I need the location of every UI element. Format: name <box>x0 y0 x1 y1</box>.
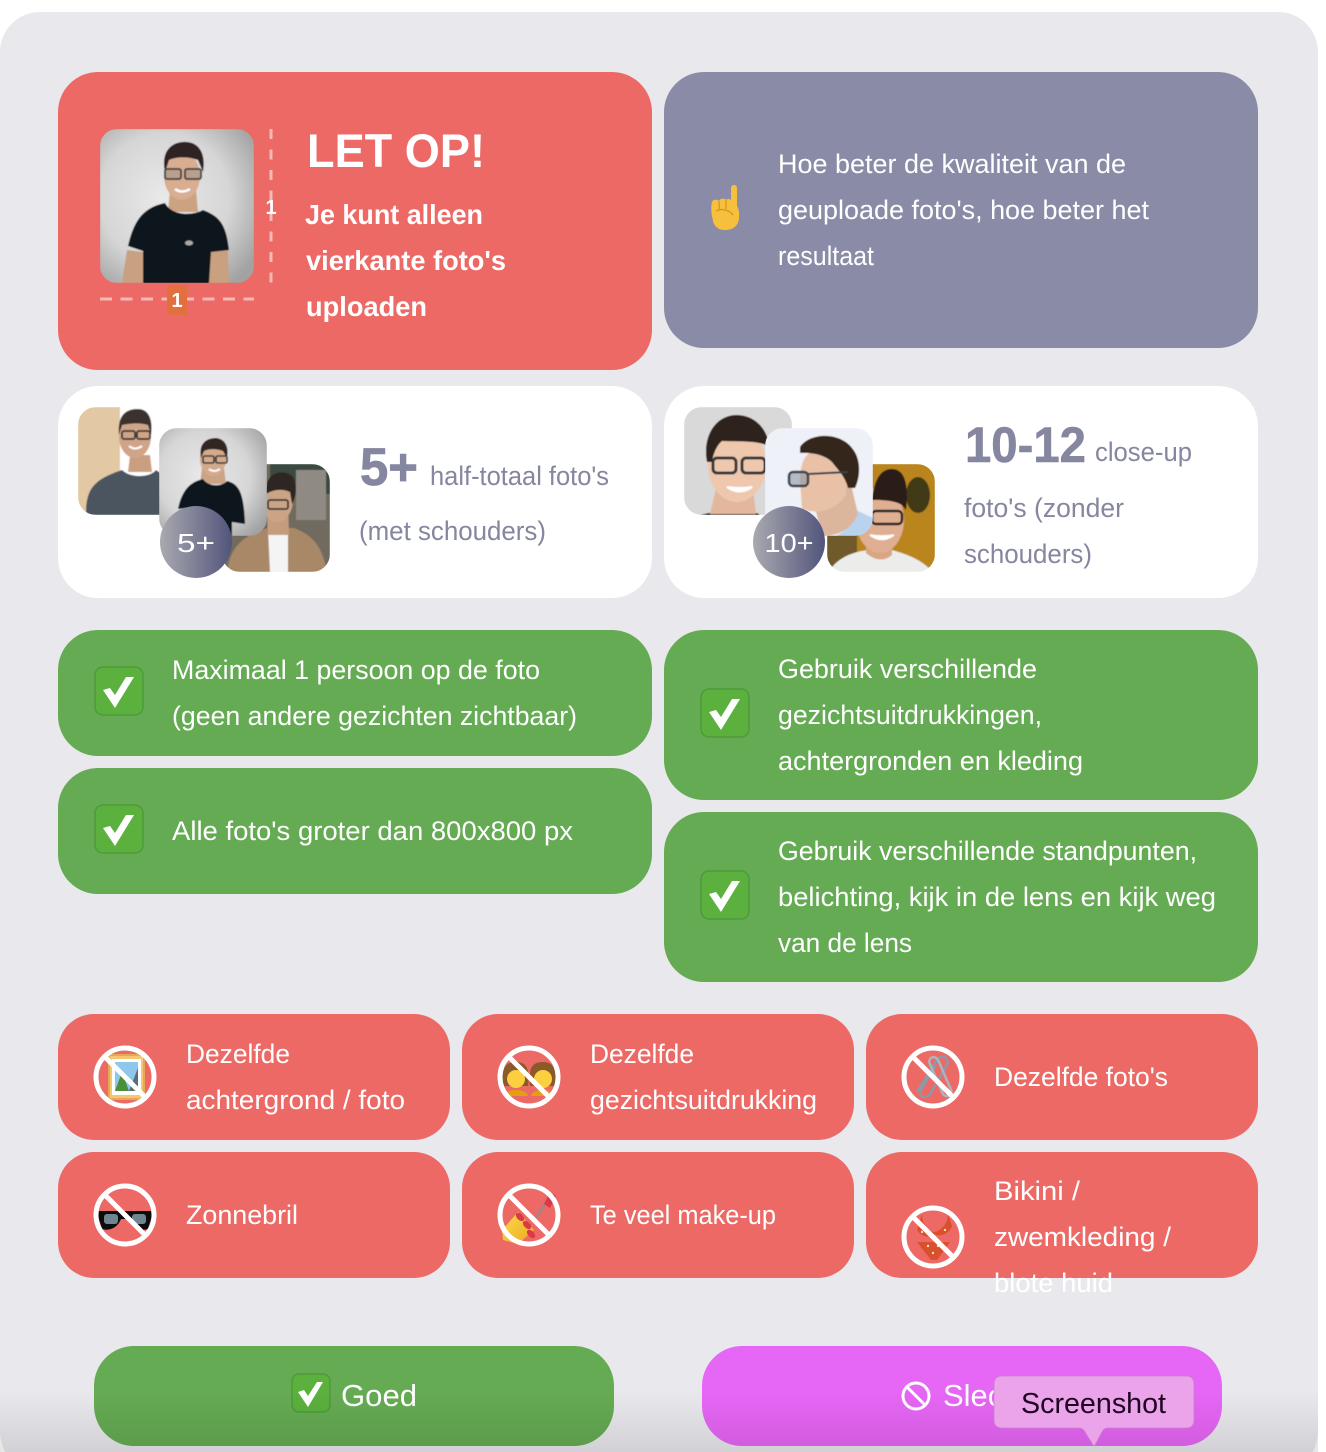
icon: no bikini <box>904 1208 962 1266</box>
icon: check <box>292 1374 330 1412</box>
badge: 10+: 10+ <box>764 528 814 558</box>
icon: no nail polish <box>500 1186 558 1244</box>
text: Dezelfde <box>590 1039 694 1069</box>
text: van de lens <box>778 928 912 958</box>
text: achtergronden en kleding <box>778 746 1083 776</box>
panel: dezelfde fotos <box>866 1014 1258 1140</box>
badge: 5+: 5+ <box>177 528 215 558</box>
text: Alle foto's groter dan 800x800 px <box>172 816 573 846</box>
warning text: vierkante foto's <box>306 245 506 276</box>
warning text: Je kunt alleen <box>305 199 483 230</box>
panel: kwaliteit tip <box>664 72 1258 348</box>
icon: check <box>701 871 749 919</box>
bottom shadow <box>0 1392 1318 1452</box>
label: Goed <box>341 1378 417 1413</box>
panel: standpunten <box>664 812 1258 982</box>
text: gezichtsuitdrukkingen, <box>778 700 1042 730</box>
button: goed <box>94 1346 614 1446</box>
tip text: Hoe beter de kwaliteit van de <box>778 149 1126 179</box>
tooltip: screenshot: Screenshot <box>1021 1388 1166 1420</box>
icon: prohibited <box>903 1383 929 1409</box>
text: zwemkleding / <box>994 1222 1172 1252</box>
panel: zonnebril <box>58 1152 450 1278</box>
tip text: geuploade foto's, hoe beter het <box>778 195 1149 225</box>
panel: let op <box>58 72 652 370</box>
tooltip: screenshot <box>994 1376 1194 1446</box>
badge: 5+ <box>160 506 232 578</box>
dashed width marker <box>100 285 254 315</box>
icon: no picture frame <box>96 1048 154 1106</box>
text: Dezelfde <box>186 1039 290 1069</box>
dashed height marker: 1 <box>265 197 277 219</box>
tip text <box>778 149 1149 271</box>
panel: bikini <box>866 1152 1258 1298</box>
panel: dezelfde achtergrond <box>58 1014 450 1140</box>
photo: smiling outdoor <box>827 464 935 572</box>
text: gezichtsuitdrukking <box>590 1085 817 1115</box>
photo: smiling close-up <box>684 407 792 515</box>
photo: jacket <box>222 464 330 572</box>
label: Slecht <box>943 1378 1029 1413</box>
close-up text: close-up <box>1095 437 1192 467</box>
text <box>186 1039 405 1115</box>
icon: no sunglasses <box>96 1186 154 1244</box>
button: slecht <box>702 1346 1222 1446</box>
text: Bikini / <box>994 1176 1081 1206</box>
text <box>778 654 1083 776</box>
text: Te veel make-up <box>590 1200 776 1230</box>
icon: check <box>95 805 143 853</box>
panel: half-totaal fotos <box>58 386 652 598</box>
close-up text <box>964 417 1192 569</box>
panel: make-up <box>462 1152 854 1278</box>
panel: close-up fotos <box>664 386 1258 598</box>
warning text: uploaden <box>306 291 427 322</box>
photo: grey shirt <box>78 407 160 515</box>
text: Zonnebril <box>186 1200 298 1230</box>
panel: groter dan 800x800 <box>58 768 652 894</box>
text <box>590 1039 817 1115</box>
dashed width marker: 1 <box>171 290 183 312</box>
heading: LET OP! <box>307 124 485 177</box>
text: (geen andere gezichten zichtbaar) <box>172 701 577 731</box>
close-up text: schouders) <box>964 539 1092 569</box>
text: Maximaal 1 persoon op de foto <box>172 655 540 685</box>
tip text: resultaat <box>778 241 874 271</box>
half-totaal text: 5+ <box>360 438 418 497</box>
text: Gebruik verschillende <box>778 654 1037 684</box>
close-up text: 10-12 <box>965 417 1086 473</box>
half-totaal text <box>359 438 609 546</box>
photo: profile <box>765 428 873 536</box>
icon: check <box>95 667 143 715</box>
panel: dezelfde gezichtsuitdrukking <box>462 1014 854 1140</box>
square portrait photo <box>100 129 254 283</box>
text: achtergrond / foto <box>186 1085 405 1115</box>
text: belichting, kijk in de lens en kijk weg <box>778 882 1216 912</box>
panel: maximaal 1 persoon <box>58 630 652 756</box>
photo: black shirt <box>159 428 267 536</box>
text: Gebruik verschillende standpunten, <box>778 836 1197 866</box>
icon: no same faces <box>500 1048 558 1106</box>
text <box>172 655 577 731</box>
icon: no paperclips <box>904 1048 962 1106</box>
half-totaal text: half-totaal foto's <box>430 461 609 491</box>
warning text <box>305 199 506 322</box>
icon: pointing finger <box>711 185 739 230</box>
icon: check <box>701 689 749 737</box>
close-up text: foto's (zonder <box>964 493 1124 523</box>
text <box>994 1176 1172 1298</box>
badge: 10+ <box>753 506 825 578</box>
half-totaal text: (met schouders) <box>359 516 546 546</box>
text: Dezelfde foto's <box>994 1062 1168 1092</box>
text: blote huid <box>994 1268 1113 1298</box>
text <box>778 836 1216 958</box>
panel: gezichtsuitdrukkingen <box>664 630 1258 800</box>
